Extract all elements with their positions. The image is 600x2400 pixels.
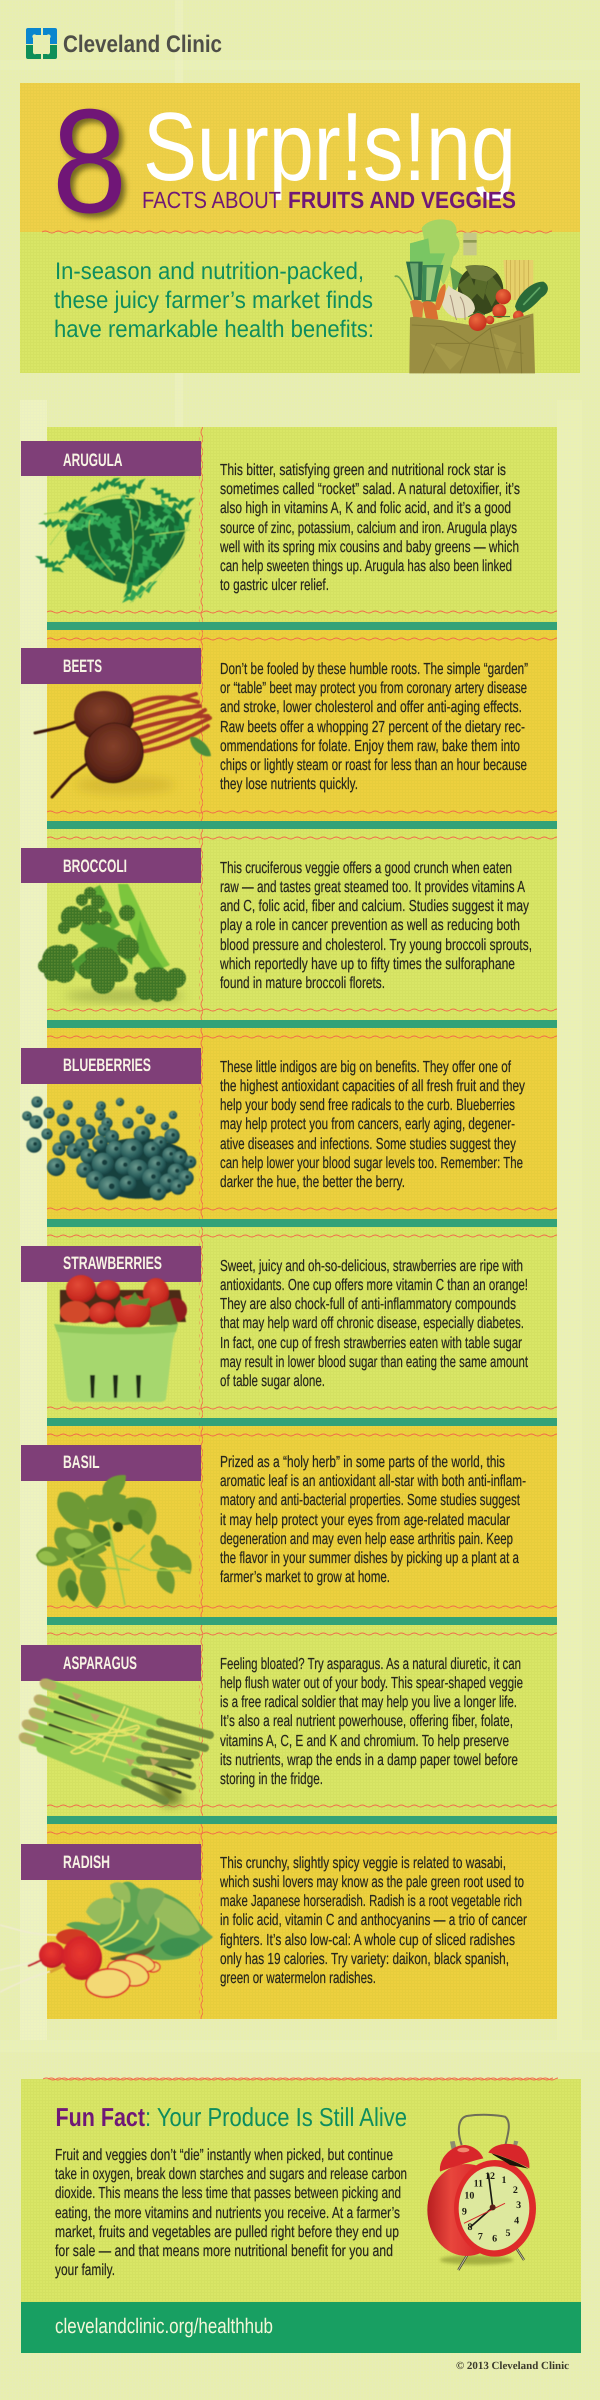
- intro text: these juicy farmer’s market finds: [54, 287, 373, 314]
- photo: arugula: [33, 473, 197, 608]
- body text: radish: [219, 1855, 527, 1987]
- panel: arugula: [21, 427, 557, 622]
- clock numerals: 9: [462, 2206, 467, 2217]
- section label: STRAWBERRIES: [63, 1253, 162, 1273]
- body text: strawberries: of table sugar alone.: [220, 1373, 325, 1390]
- copyright: © 2013 Cleveland Clinic: [456, 2360, 569, 2372]
- heading: : Your Produce Is Still Alive: [145, 2102, 407, 2132]
- divider bar: [47, 821, 557, 829]
- panel: header: [20, 79, 580, 373]
- subtitle: [142, 187, 516, 213]
- body text: basil: [220, 1454, 526, 1586]
- title: 8: 8: [52, 79, 127, 244]
- clock numerals: 10: [464, 2190, 474, 2201]
- clock numerals: 6: [492, 2233, 497, 2244]
- photo: strawberry basket: [54, 1275, 187, 1402]
- clock numerals: 11: [474, 2178, 483, 2189]
- clock numerals: 2: [513, 2184, 518, 2195]
- clock numerals: 8: [467, 2221, 472, 2232]
- panel: beets: [21, 630, 557, 821]
- heading: Fun Fact: [56, 2102, 145, 2132]
- footer url: clevelandclinic.org/healthhub: [55, 2315, 273, 2338]
- panel: basil: [21, 1426, 557, 1617]
- section label: [21, 1844, 201, 1880]
- body text: radish: green or watermelon radishes.: [220, 1970, 376, 1987]
- subtitle: FACTS ABOUT: [142, 187, 281, 213]
- subtitle: FRUITS AND VEGGIES: [288, 187, 516, 213]
- body text: basil: farmer’s market to grow at home.: [220, 1569, 390, 1586]
- section label: [21, 848, 201, 883]
- body text: arugula: [219, 462, 520, 594]
- photo: beets: [35, 691, 211, 797]
- clock numerals: 7: [478, 2231, 483, 2242]
- section label: BASIL: [63, 1452, 100, 1472]
- body text: radish: This crunchy, slightly spicy veggie is related to wasabi,: [220, 1855, 506, 1872]
- body text: fun fact: Fruit and veggies don’t “die” instantly when picked, but continue: [55, 2147, 393, 2164]
- body text: arugula: to gastric ulcer relief.: [220, 577, 329, 594]
- body text: broccoli: [219, 860, 532, 992]
- section label: [21, 441, 201, 476]
- title: Surprising: Surpr!s!ng: [143, 92, 516, 201]
- section label: [21, 1048, 201, 1084]
- body text: fun fact: [55, 2147, 407, 2279]
- section label: [21, 1645, 201, 1681]
- photo: basil: [35, 1469, 197, 1611]
- section label: [21, 648, 201, 684]
- photo: radish: [0, 1882, 213, 1999]
- footer bar: [21, 2302, 581, 2353]
- clock numerals: 1: [501, 2174, 506, 2185]
- photo: blueberries: [22, 1096, 196, 1200]
- panel: radish: [0, 1824, 557, 2019]
- body text: arugula: also high in vitamins A, K and folic acid, and it’s a good: [220, 500, 511, 517]
- intro text: In-season and nutrition-packed,: [55, 258, 364, 285]
- body text: fun fact: dioxide. This means the less time that passes between picking and: [55, 2185, 401, 2202]
- clock numerals: 5: [505, 2227, 510, 2238]
- body text: broccoli: found in mature broccoli florets.: [220, 975, 385, 992]
- body text: fun fact: take in oxygen, break down starches and sugars and release carbon: [55, 2166, 407, 2183]
- photo: asparagus: [23, 1683, 210, 1806]
- body text: radish: only has 19 calories. Try variety: daikon, black spanish,: [220, 1951, 509, 1968]
- illustration: grocery bag of vegetables: [395, 219, 548, 373]
- illustration: red alarm clock: [427, 2115, 536, 2270]
- section label: [21, 1445, 201, 1481]
- section label: BEETS: [63, 656, 102, 676]
- divider bar: [47, 1617, 557, 1625]
- intro text: have remarkable health benefits:: [54, 316, 374, 343]
- clock numerals: 4: [514, 2215, 519, 2226]
- body text: arugula: This bitter, satisfying green and nutritional rock star is: [220, 462, 506, 479]
- section label: ARUGULA: [63, 450, 122, 470]
- panel: fun fact: [21, 2077, 581, 2302]
- photo: broccoli: [38, 884, 186, 1002]
- panel: strawberries: [21, 1227, 557, 1418]
- body text: beets: [220, 661, 528, 793]
- divider bar: [47, 1020, 557, 1028]
- body text: strawberries: [220, 1258, 528, 1390]
- body text: blueberries: darker the hue, the better the berry.: [220, 1174, 405, 1191]
- panel: asparagus: [21, 1625, 557, 1816]
- section label: [21, 1246, 201, 1282]
- body text: basil: Prized as a “holy herb” in some parts of the world, this: [220, 1454, 505, 1471]
- divider bar: [47, 622, 557, 630]
- panel: broccoli: [21, 829, 557, 1020]
- clock numerals: 12: [485, 2170, 495, 2181]
- divider bar: [47, 1418, 557, 1426]
- logo: Cleveland Clinic: [26, 28, 222, 59]
- section label: BROCCOLI: [63, 856, 127, 876]
- section label: RADISH: [63, 1852, 110, 1872]
- section label: BLUEBERRIES: [63, 1055, 151, 1075]
- panel: blueberries: [21, 1028, 557, 1219]
- section label: ASPARAGUS: [63, 1653, 137, 1673]
- clock numerals: 3: [516, 2199, 521, 2210]
- intro text: [54, 258, 374, 343]
- body text: fun fact: eating, the more vitamins and nutrients you receive. At a farmer’s: [55, 2205, 400, 2222]
- clock numerals: [462, 2170, 521, 2244]
- body text: basil: it may help protect your eyes from age-related macular: [220, 1512, 510, 1529]
- divider bar: [47, 1219, 557, 1227]
- body text: asparagus: storing in the fridge.: [220, 1771, 323, 1788]
- divider bar: [47, 1816, 557, 1824]
- body text: fun fact: market, fruits and vegetables are pulled right before they end up: [55, 2224, 399, 2241]
- body text: blueberries: [220, 1059, 525, 1191]
- heading: [56, 2102, 407, 2132]
- body text: fun fact: your family.: [55, 2262, 115, 2279]
- body text: asparagus: [220, 1656, 523, 1788]
- logo: Cleveland Clinic: Cleveland Clinic: [63, 31, 222, 58]
- body text: broccoli: which reportedly have up to fifty times the sulforaphane: [219, 956, 515, 973]
- icon: Cleveland Clinic cross: [26, 28, 57, 59]
- body text: fun fact: for sale — and that means more nutritional benefit for you and: [55, 2243, 393, 2260]
- body text: beets: they lose nutrients quickly.: [220, 776, 358, 793]
